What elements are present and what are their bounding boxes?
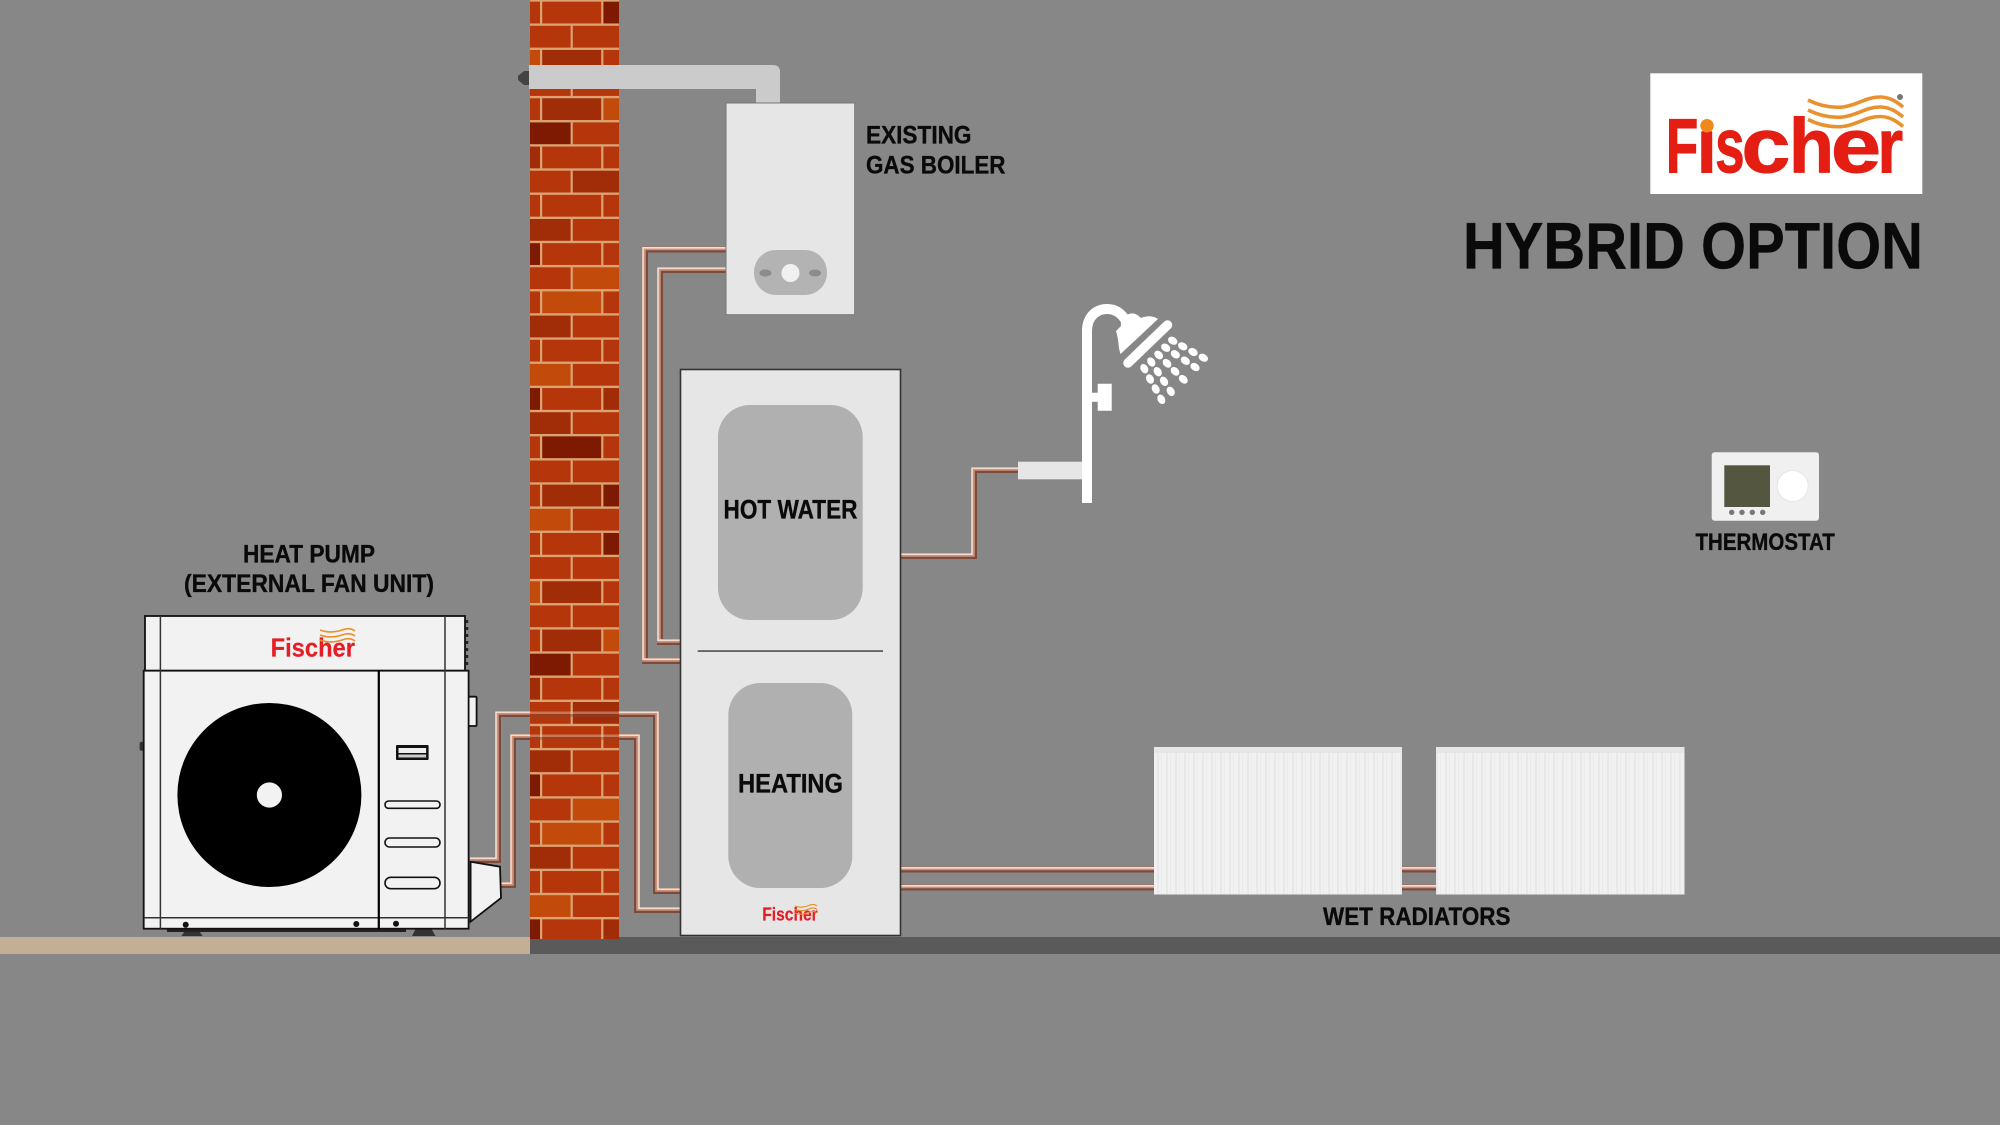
label: existing gas boiler: EXISTING <box>866 122 972 150</box>
label: heat pump <box>184 540 434 598</box>
label: hot water: HOT WATER <box>724 494 858 524</box>
title: HYBRID OPTION <box>1463 209 1923 282</box>
right drain box <box>471 862 501 922</box>
flue cap <box>518 71 529 85</box>
shower bar <box>1128 325 1168 363</box>
logo wordmark: s <box>1715 103 1745 189</box>
logo wordmark: h <box>1789 103 1834 189</box>
unit fischer logo: Fischer <box>271 633 355 663</box>
fischer logo <box>1650 73 1922 194</box>
logo wordmark: i <box>1697 103 1717 189</box>
thermostat screen <box>1724 465 1770 507</box>
right connector <box>469 697 477 726</box>
pipe: hot water to shower <box>900 468 1019 556</box>
unit main body <box>144 671 469 929</box>
left clip <box>140 742 144 751</box>
thermostat <box>1712 452 1819 521</box>
floor: outdoor ground <box>0 937 530 954</box>
label: heat pump: (EXTERNAL FAN UNIT) <box>184 570 434 598</box>
shower <box>1018 309 1209 503</box>
feet <box>182 928 436 936</box>
radiator left <box>1154 747 1402 894</box>
label: heating: HEATING <box>738 769 843 799</box>
pipe: boiler flow to tank <box>643 248 726 661</box>
heating tank <box>728 683 852 888</box>
logo waves <box>1808 97 1903 127</box>
logo wordmark: c <box>1742 103 1790 189</box>
small fischer logo: Fischer <box>762 905 818 925</box>
label: wet radiators: WET RADIATORS <box>1323 903 1510 931</box>
control handle <box>396 745 429 760</box>
vent slots <box>385 801 440 889</box>
label: heat pump: HEAT PUMP <box>243 540 375 568</box>
pipes seen through wall <box>530 712 619 740</box>
base shadow <box>167 930 406 932</box>
radiator right <box>1436 747 1684 894</box>
logo wordmark: e <box>1831 103 1881 189</box>
pipe: radiator flow <box>900 868 1440 870</box>
label: existing gas boiler <box>866 122 1006 180</box>
label: thermostat: THERMOSTAT <box>1696 529 1835 556</box>
shower riser <box>1087 309 1126 503</box>
pipe: boiler return to tank <box>658 268 726 642</box>
boiler control panel <box>754 250 827 295</box>
pipe: heat pump flow <box>470 712 681 891</box>
logo registered mark <box>1897 94 1903 100</box>
pipe: heat pump return <box>490 735 681 910</box>
boiler flue <box>529 65 780 104</box>
logo wordmark: F <box>1666 103 1698 189</box>
logo wordmark: r <box>1878 103 1903 189</box>
shower valve <box>1092 384 1112 411</box>
existing gas boiler <box>726 103 855 315</box>
heat pump unit <box>140 616 501 936</box>
water droplets <box>1139 335 1209 405</box>
hot water tank <box>718 405 863 620</box>
floor: indoor ground <box>530 937 2000 954</box>
shower mount block <box>1018 462 1082 479</box>
thermostat dial <box>1777 470 1808 502</box>
unit top panel <box>145 616 465 671</box>
base bolts <box>183 921 399 928</box>
fan hub <box>257 782 282 808</box>
brick wall <box>530 0 619 939</box>
storage unit <box>680 370 900 936</box>
thermostat buttons <box>1729 510 1765 515</box>
boiler slots <box>760 270 821 276</box>
logo orange dot <box>1700 119 1714 132</box>
panel lines <box>144 616 469 929</box>
tank divider <box>698 650 883 652</box>
label: existing gas boiler: GAS BOILER <box>866 152 1006 180</box>
vent ridge <box>466 620 468 668</box>
shower head <box>1116 313 1158 354</box>
fan grille <box>177 703 361 887</box>
pipe: radiator return <box>900 886 1440 888</box>
logo dot mask <box>1698 113 1716 131</box>
boiler centre dial <box>782 264 800 282</box>
